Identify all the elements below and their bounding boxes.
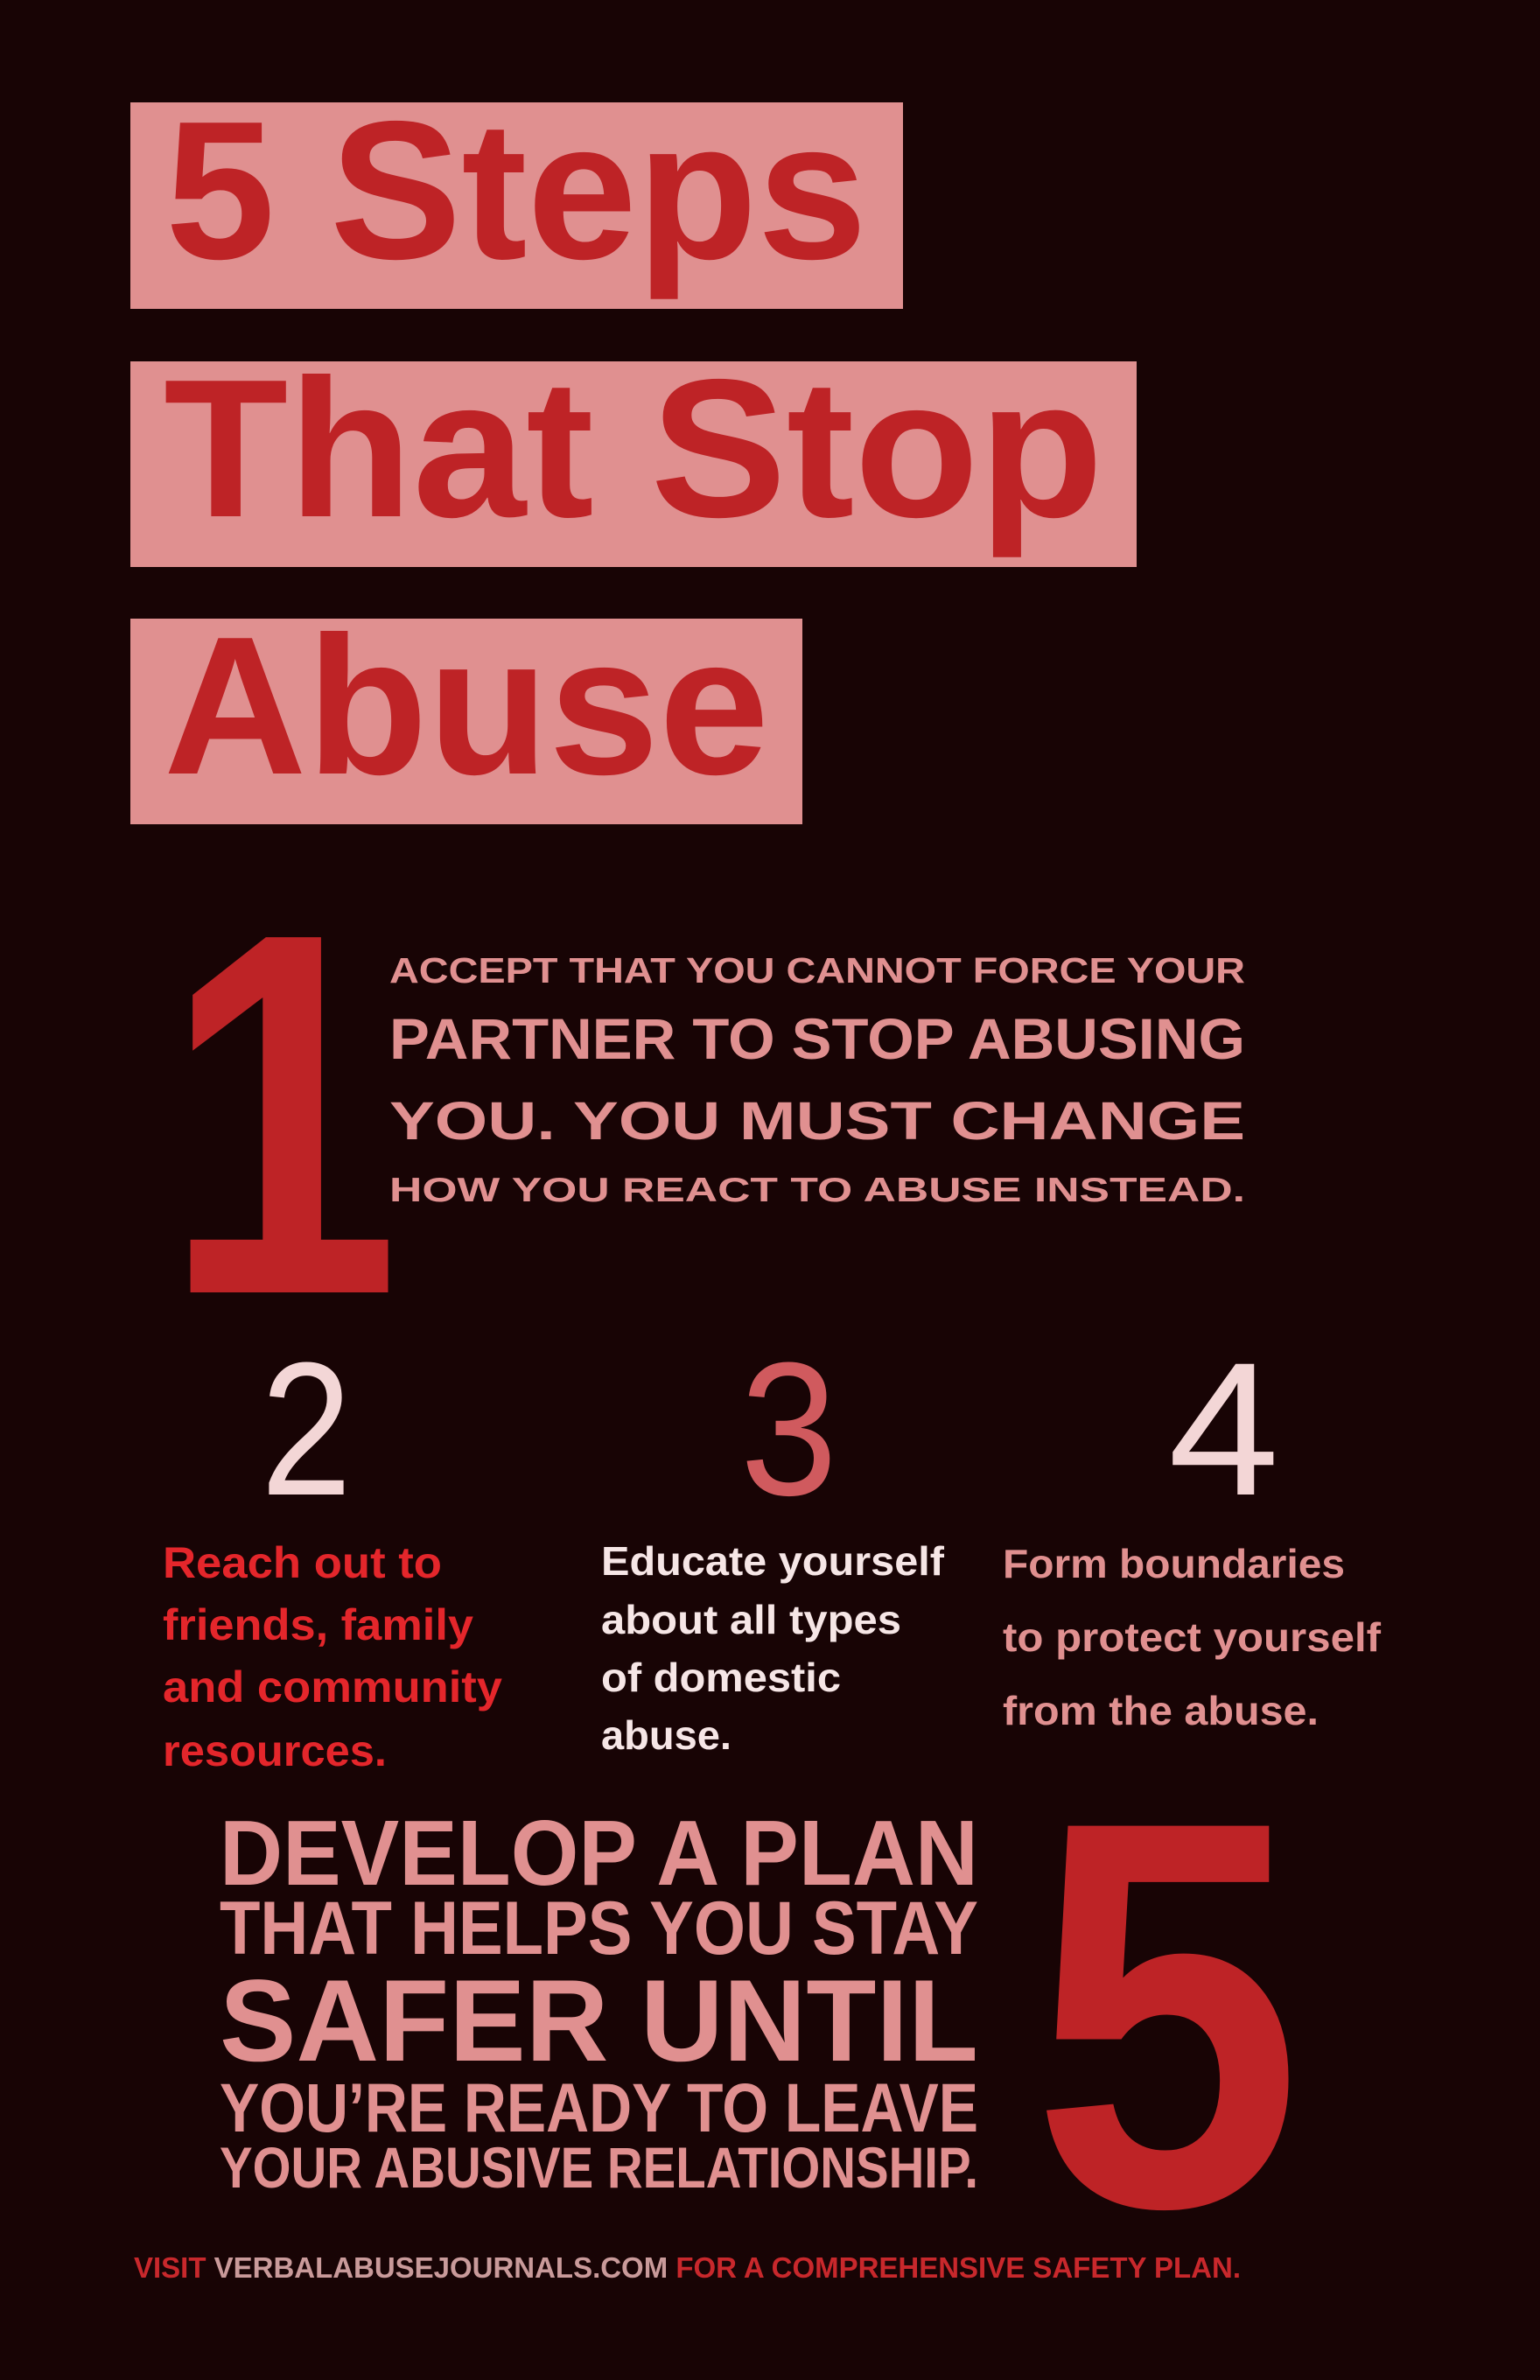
number 2: 2: [261, 1323, 352, 1535]
title box: 5 Steps: 5 Steps: [165, 80, 867, 300]
step 3 text: [601, 1538, 945, 1758]
step 2 text: Reach out to: [163, 1538, 442, 1587]
step 3 text: abuse.: [601, 1712, 732, 1758]
step 1 text: ACCEPT THAT YOU CANNOT FORCE YOUR: [389, 950, 1245, 990]
step 5 text: YOU’RE READY TO LEAVE: [220, 2068, 978, 2146]
step 1 text: [389, 950, 1245, 1209]
step 2 text: friends, family: [163, 1600, 473, 1649]
step 5 text: YOUR ABUSIVE RELATIONSHIP.: [220, 2135, 978, 2200]
number 3: 3: [740, 1323, 837, 1535]
step 3 text: Educate yourself: [601, 1538, 945, 1584]
step 5 text: [220, 1802, 978, 2200]
step 5 text: THAT HELPS YOU STAY: [220, 1886, 978, 1970]
title box: That Stop: That Stop: [164, 338, 1103, 558]
title box: Abuse: Abuse: [164, 595, 769, 816]
step 3 text: about all types: [601, 1597, 901, 1642]
step 1 text: HOW YOU REACT TO ABUSE INSTEAD.: [389, 1172, 1245, 1209]
step 2: [163, 1323, 502, 1775]
step 1: [164, 826, 1245, 1403]
step 2 text: resources.: [163, 1726, 387, 1775]
step 4 text: Form boundaries: [1003, 1541, 1345, 1586]
number 5: 5: [1032, 1706, 1302, 2322]
step 5 text: SAFER UNTIL: [220, 1956, 978, 2086]
number 1: 1: [164, 826, 400, 1403]
footer: VISIT VERBALABUSEJOURNALS.COM FOR A COMPREHENSIVE SAFETY PLAN.: [134, 2251, 1241, 2284]
step 1 text: YOU. YOU MUST CHANGE: [389, 1091, 1245, 1151]
step 3 text: of domestic: [601, 1655, 841, 1700]
step 2 text: and community: [163, 1662, 502, 1712]
step 4 text: [1003, 1541, 1382, 1733]
step 3: [601, 1323, 945, 1758]
step 4 text: from the abuse.: [1003, 1688, 1319, 1733]
step 4: [1003, 1323, 1382, 1733]
step 5 text: DEVELOP A PLAN: [220, 1802, 978, 1905]
step 2 text: [163, 1538, 502, 1775]
number 4: 4: [1168, 1323, 1279, 1535]
step 5: [220, 1706, 1302, 2322]
step 1 text: PARTNER TO STOP ABUSING: [389, 1006, 1245, 1071]
step 4 text: to protect yourself: [1003, 1614, 1382, 1660]
title: [130, 80, 1137, 824]
